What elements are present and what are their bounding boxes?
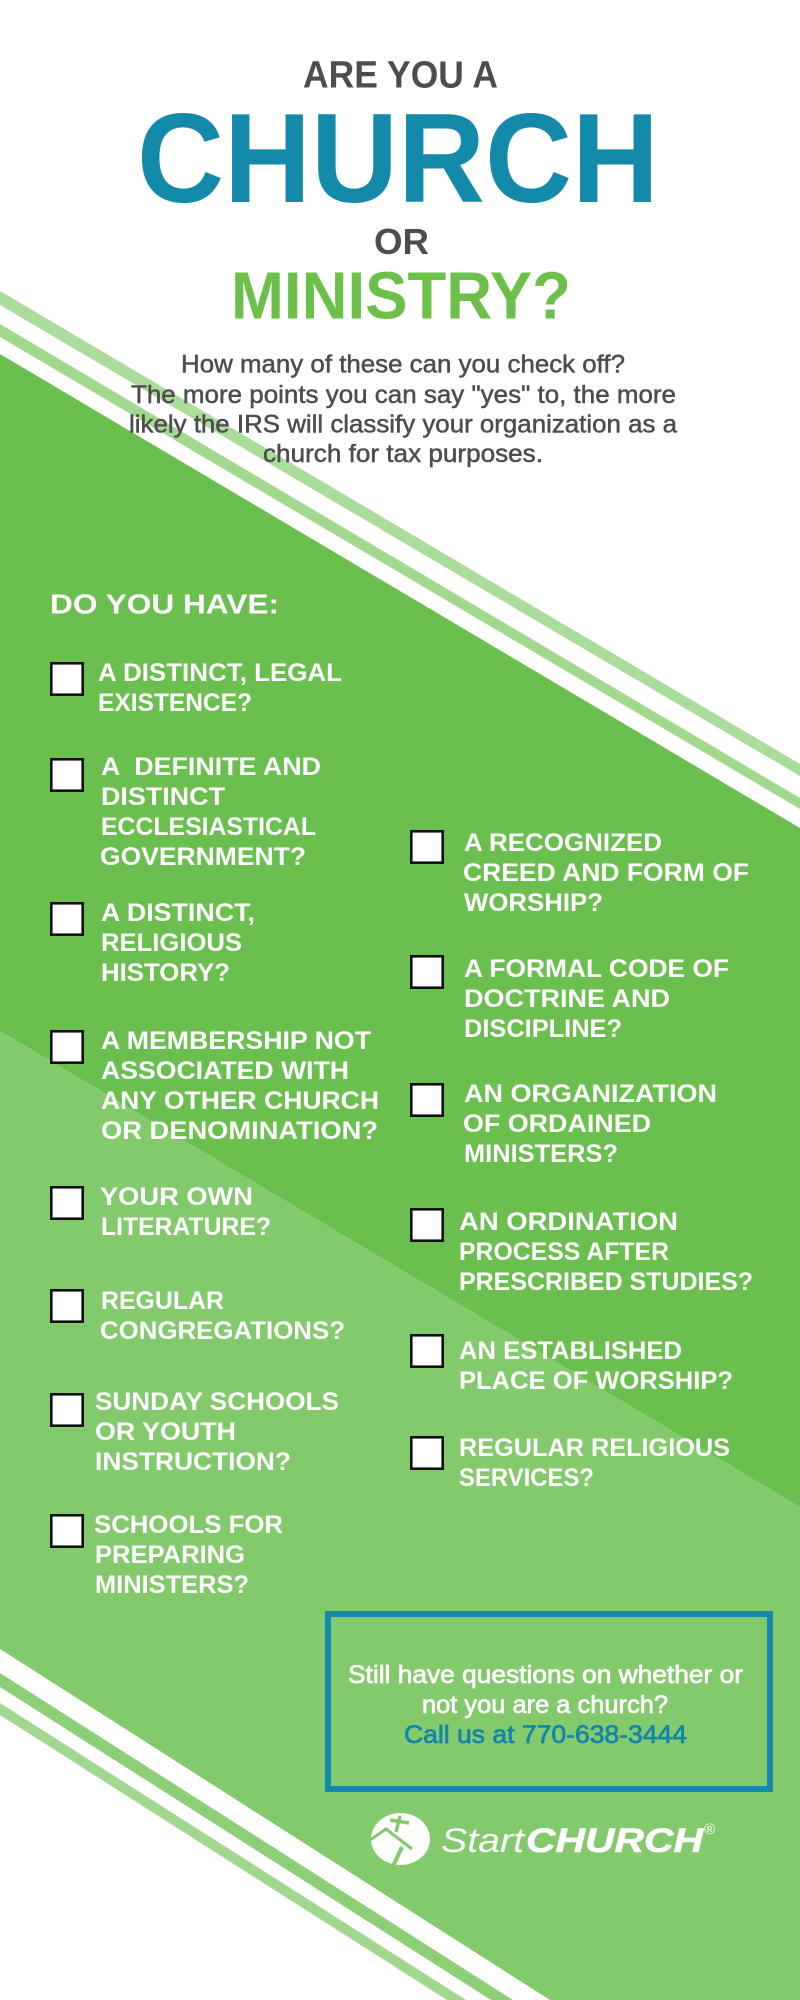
item: place of worship	[411, 1335, 733, 1395]
item: ecclesiastical government: DISTINCT	[101, 783, 225, 811]
item: religious history: RELIGIOUS	[101, 929, 242, 957]
item: schools for ministers: MINISTERS?	[95, 1571, 249, 1599]
item: sunday schools: SUNDAY SCHOOLS	[95, 1388, 339, 1416]
intro paragraph: How many of these can you check off?	[181, 350, 625, 378]
item: creed and worship	[411, 829, 749, 917]
intro paragraph	[129, 350, 677, 468]
item: schools for ministers	[51, 1511, 283, 1599]
item: ordained ministers: AN ORGANIZATION	[464, 1080, 717, 1108]
intro paragraph: The more points you can say "yes" to, the more	[131, 381, 676, 409]
title line: ministry: MINISTRY?	[231, 258, 571, 334]
item: ordained ministers: OF ORDAINED	[463, 1110, 651, 1138]
intro paragraph: likely the IRS will classify your organization as a	[129, 410, 677, 438]
item: religious services: REGULAR RELIGIOUS	[459, 1434, 730, 1462]
logo: StartCHURCH	[370, 1813, 715, 1866]
item: creed and worship: A RECOGNIZED	[464, 829, 662, 857]
title line: are you a: ARE YOU A	[303, 54, 498, 96]
top diagonal stripes	[0, 291, 800, 809]
icon: church on circle	[370, 1813, 430, 1866]
callout text: not you are a church?	[422, 1691, 668, 1719]
item: sunday schools: OR YOUTH	[95, 1418, 236, 1446]
title line: or: OR	[374, 221, 429, 262]
registered mark: ®	[704, 1821, 715, 1838]
item: literature	[51, 1183, 271, 1241]
item: ordained ministers: MINISTERS?	[464, 1140, 618, 1168]
item: ecclesiastical government: ECCLESIASTICAL	[101, 813, 316, 841]
heading: do you have: DO YOU HAVE:	[50, 588, 279, 620]
item: membership	[51, 1027, 379, 1145]
item: creed and worship: CREED AND FORM OF	[463, 859, 749, 887]
item: ordained ministers	[411, 1080, 717, 1168]
item: code of doctrine: DOCTRINE AND	[464, 985, 670, 1013]
item: congregations: CONGREGATIONS?	[100, 1317, 345, 1345]
logo wordmark: Start	[441, 1822, 526, 1860]
checklist: left column	[51, 659, 379, 1599]
item: legal existence: EXISTENCE?	[98, 689, 252, 717]
item: membership: ANY OTHER CHURCH	[101, 1087, 379, 1115]
item: ordination process: PROCESS AFTER	[459, 1238, 669, 1266]
item: religious services	[411, 1434, 730, 1492]
item: religious services: SERVICES?	[459, 1464, 594, 1492]
item: place of worship: PLACE OF WORSHIP?	[459, 1367, 733, 1395]
callout text	[348, 1661, 743, 1749]
item: creed and worship: WORSHIP?	[464, 889, 603, 917]
bottom diagonal stripes	[0, 1673, 513, 2000]
item: religious history: HISTORY?	[101, 959, 230, 987]
item: ecclesiastical government	[51, 753, 321, 871]
item: legal existence	[51, 659, 342, 717]
item: code of doctrine	[411, 955, 729, 1043]
item: legal existence: A DISTINCT, LEGAL	[98, 659, 342, 687]
item: membership: ASSOCIATED WITH	[101, 1057, 349, 1085]
item: membership: A MEMBERSHIP NOT	[101, 1027, 371, 1055]
item: ordination process: AN ORDINATION	[459, 1208, 678, 1236]
callout box	[328, 1614, 770, 1789]
title line: church: CHURCH	[137, 87, 659, 229]
callout text: Call us at 770-638-3444	[404, 1721, 687, 1749]
item: code of doctrine: DISCIPLINE?	[464, 1015, 622, 1043]
item: code of doctrine: A FORMAL CODE OF	[464, 955, 729, 983]
item: religious history	[51, 899, 255, 987]
item: ecclesiastical government: GOVERNMENT?	[100, 843, 306, 871]
item: schools for ministers: SCHOOLS FOR	[94, 1511, 283, 1539]
item: sunday schools	[51, 1388, 339, 1476]
dark green diagonal band	[0, 354, 800, 1507]
callout text: Still have questions on whether or	[348, 1661, 743, 1689]
logo wordmark	[441, 1822, 705, 1860]
item: religious history: A DISTINCT,	[101, 899, 255, 927]
title	[137, 54, 659, 334]
item: congregations	[51, 1287, 345, 1345]
logo wordmark: CHURCH	[526, 1822, 705, 1860]
item: place of worship: AN ESTABLISHED	[459, 1337, 682, 1365]
item: schools for ministers: PREPARING	[95, 1541, 245, 1569]
item: ordination process: PRESCRIBED STUDIES?	[459, 1268, 753, 1296]
item: sunday schools: INSTRUCTION?	[95, 1448, 291, 1476]
item: ordination process	[411, 1208, 753, 1296]
intro paragraph: church for tax purposes.	[263, 440, 543, 468]
light green diagonal band	[0, 1031, 800, 2000]
item: membership: OR DENOMINATION?	[101, 1117, 378, 1145]
item: literature: LITERATURE?	[101, 1213, 271, 1241]
checklist: right column	[411, 829, 753, 1492]
item: literature: YOUR OWN	[100, 1183, 253, 1211]
item: congregations: REGULAR	[101, 1287, 224, 1315]
item: ecclesiastical government: A DEFINITE AND	[101, 753, 321, 781]
